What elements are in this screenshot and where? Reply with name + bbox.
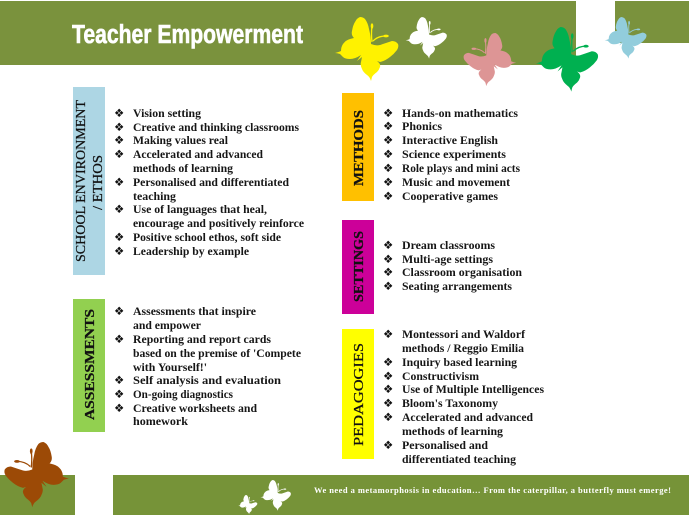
list: settings items: Dream classrooms xyxy=(402,238,495,252)
list: settings items: ❖ xyxy=(383,238,393,252)
icon: tiny white butterfly xyxy=(238,495,257,514)
list: assessments items: Self analysis and evaluation xyxy=(133,373,281,387)
list: pedagogies items: ❖ xyxy=(383,438,393,452)
list: pedagogies items: methods / Reggio Emilia xyxy=(402,341,524,355)
list: assessments items: and empower xyxy=(133,318,202,332)
list: pedagogies items: ❖ xyxy=(383,382,393,396)
list: assessments items: ❖ xyxy=(114,304,124,318)
list: settings items: ❖ xyxy=(383,265,393,279)
list: settings items: ❖ xyxy=(383,279,393,293)
list: assessments items: Assessments that inspire xyxy=(133,304,257,318)
list: school environment items: ❖ xyxy=(114,120,124,134)
panel: settings xyxy=(342,220,522,314)
icon: pink butterfly xyxy=(464,33,516,86)
icon: yellow butterfly xyxy=(335,17,398,81)
label: pedagogies: PEDAGOGIES xyxy=(352,343,367,446)
list: methods items: ❖ xyxy=(383,161,393,175)
list: pedagogies items: Personalised and xyxy=(402,438,488,452)
list: school environment items: ❖ xyxy=(114,106,124,120)
list: assessments items: On-going diagnostics xyxy=(133,387,233,401)
label: school environment xyxy=(74,100,106,262)
list: settings items: ❖ xyxy=(383,252,393,266)
list: assessments items: ❖ xyxy=(114,332,124,346)
list: settings items xyxy=(383,238,522,293)
list: methods items: ❖ xyxy=(383,147,393,161)
list: pedagogies items: ❖ xyxy=(383,410,393,424)
list: assessments items: ❖ xyxy=(114,401,124,415)
list: school environment items: Creative and thinking classrooms xyxy=(133,120,299,134)
list: pedagogies items: differentiated teaching xyxy=(402,452,516,466)
list: assessments items: based on the premise of 'Compete xyxy=(133,346,302,360)
list: methods items: ❖ xyxy=(383,119,393,133)
icon: green butterfly xyxy=(536,27,598,92)
list: assessments items: ❖ xyxy=(114,387,124,401)
list: settings items: Classroom organisation xyxy=(402,265,522,279)
list: pedagogies items: methods of learning xyxy=(402,424,503,438)
list: methods items xyxy=(383,106,520,203)
list: assessments items: homework xyxy=(133,414,188,428)
list: methods items: Cooperative games xyxy=(402,189,498,203)
list: pedagogies items: Inquiry based learning xyxy=(402,355,517,369)
list: school environment items: Leadership by example xyxy=(133,244,250,258)
icon: small white butterfly xyxy=(260,480,291,511)
list: pedagogies items: Use of Multiple Intelligences xyxy=(402,382,544,396)
label: settings: SETTINGS xyxy=(352,231,367,302)
list: school environment items: Personalised and differentiated xyxy=(133,175,289,189)
list: pedagogies items: ❖ xyxy=(383,355,393,369)
list: pedagogies items: Accelerated and advanced xyxy=(402,410,533,424)
label: methods: METHODS xyxy=(352,110,367,186)
list: school environment items: Vision setting xyxy=(133,106,201,120)
list: methods items: ❖ xyxy=(383,175,393,189)
list: school environment items: methods of learning xyxy=(133,161,233,175)
bottom banner left xyxy=(0,475,75,515)
footer tagline: We need a metamorphosis in education… From the caterpillar, a butterfly must emerge! xyxy=(314,485,671,495)
list: methods items: Phonics xyxy=(402,119,442,133)
list: assessments items: Creative worksheets and xyxy=(133,401,257,415)
list: assessments items xyxy=(114,304,302,428)
list: settings items: Seating arrangements xyxy=(402,279,512,293)
list: school environment items: ❖ xyxy=(114,230,124,244)
label: school environment: / ETHOS xyxy=(91,155,106,210)
list: assessments items: ❖ xyxy=(114,373,124,387)
icon: white butterfly xyxy=(406,17,447,59)
list: school environment items: teaching xyxy=(133,189,176,203)
icon: blue butterfly xyxy=(605,17,646,59)
list: assessments items: with Yourself!' xyxy=(133,360,207,374)
list: school environment items: ❖ xyxy=(114,175,124,189)
list: school environment items: Making values real xyxy=(133,133,229,147)
list: school environment items: Use of languages that heal, xyxy=(133,202,267,216)
list: school environment items: ❖ xyxy=(114,244,124,258)
panel: methods xyxy=(342,93,520,203)
list: pedagogies items xyxy=(383,327,544,466)
list: school environment items: ❖ xyxy=(114,147,124,161)
bottom banner right xyxy=(113,475,689,515)
list: school environment items: Positive school ethos, soft side xyxy=(133,230,282,244)
list: school environment items xyxy=(114,106,305,258)
list: methods items: Hands-on mathematics xyxy=(402,106,518,120)
list: pedagogies items: Bloom's Taxonomy xyxy=(402,396,498,410)
top banner left xyxy=(0,1,576,65)
list: methods items: Interactive English xyxy=(402,133,498,147)
list: pedagogies items: ❖ xyxy=(383,369,393,383)
list: pedagogies items: Montessori and Waldorf xyxy=(402,327,526,341)
list: school environment items: ❖ xyxy=(114,133,124,147)
list: pedagogies items: ❖ xyxy=(383,327,393,341)
list: school environment items: Accelerated and advanced xyxy=(133,147,263,161)
list: methods items: ❖ xyxy=(383,189,393,203)
icon: brown butterfly xyxy=(4,442,69,507)
panel: assessments xyxy=(73,299,302,432)
list: settings items: Multi-age settings xyxy=(402,252,493,266)
panel: pedagogies xyxy=(342,327,544,466)
list: methods items: ❖ xyxy=(383,106,393,120)
top banner right xyxy=(615,1,689,43)
list: school environment items: encourage and positively reinforce xyxy=(133,216,305,230)
list: pedagogies items: Constructivism xyxy=(402,369,479,383)
list: pedagogies items: ❖ xyxy=(383,396,393,410)
list: assessments items: Reporting and report cards xyxy=(133,332,271,346)
label: school environment: SCHOOL ENVIRONMENT xyxy=(74,100,89,262)
label: assessments: ASSESSMENTS xyxy=(83,309,98,420)
list: school environment items: ❖ xyxy=(114,202,124,216)
list: methods items: Role plays and mini acts xyxy=(402,161,520,175)
panel: school environment / ethos xyxy=(73,87,305,275)
title: Teacher Empowerment xyxy=(72,21,303,49)
list: methods items: Music and movement xyxy=(402,175,510,189)
list: methods items: Science experiments xyxy=(402,147,506,161)
list: methods items: ❖ xyxy=(383,133,393,147)
